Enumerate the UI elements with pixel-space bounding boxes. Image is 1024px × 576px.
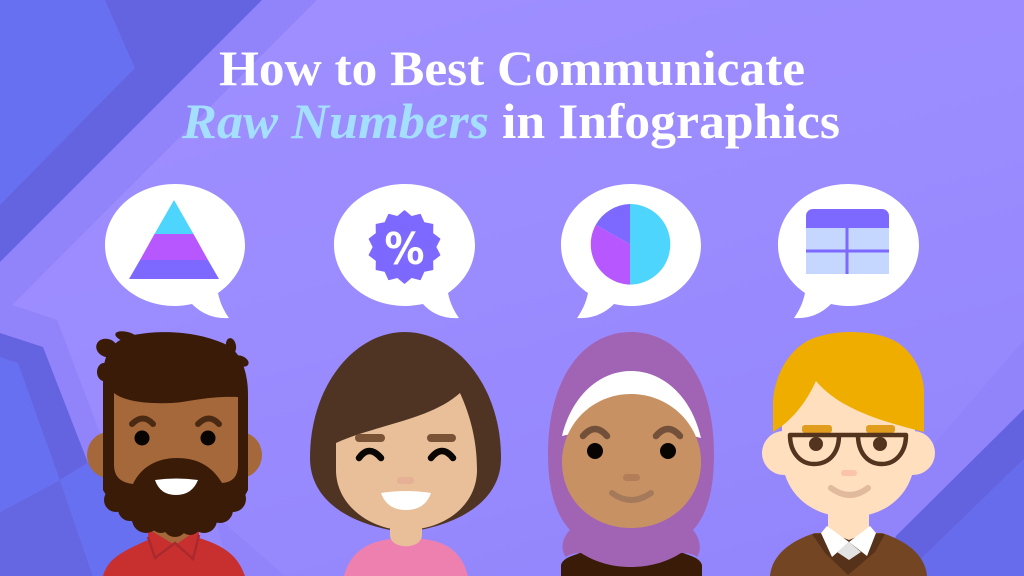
hair <box>773 332 924 432</box>
eyes and brows <box>583 429 680 459</box>
closed eyes <box>359 451 453 458</box>
shirt collar <box>821 526 876 560</box>
title <box>181 40 840 149</box>
speech bubble: percent badge <box>334 184 475 318</box>
icon: pyramid <box>129 200 219 279</box>
smile <box>612 493 651 500</box>
icon: percent badge: % <box>384 224 424 275</box>
shoulders <box>561 553 702 576</box>
smile <box>155 478 198 495</box>
neck <box>828 505 869 540</box>
character: blond man with glasses <box>762 332 935 576</box>
hair and beard <box>94 329 250 537</box>
pupils <box>809 437 887 451</box>
glasses <box>790 435 906 464</box>
icon: table <box>806 209 889 274</box>
character: bearded man <box>87 329 262 576</box>
white headband <box>562 371 701 438</box>
brows <box>802 425 895 433</box>
face <box>782 375 915 517</box>
eyes and brows <box>132 418 219 446</box>
nose <box>397 477 414 484</box>
sweater <box>770 533 927 576</box>
face <box>114 393 238 484</box>
nose <box>623 474 640 481</box>
neck <box>390 520 422 546</box>
speech bubble: pie chart <box>561 184 701 318</box>
icon: pie chart <box>591 204 670 285</box>
shirt <box>103 530 245 576</box>
character: woman with brown bob <box>310 332 501 576</box>
speech bubble: table <box>778 184 919 318</box>
character: woman in hijab <box>548 332 714 576</box>
face <box>562 394 701 528</box>
icon: percent badge <box>369 211 440 283</box>
ears <box>87 432 262 478</box>
smile <box>381 491 431 510</box>
title line 2: in Infographics <box>502 93 840 149</box>
smile <box>831 488 868 495</box>
nose <box>841 470 857 476</box>
brows <box>355 434 456 442</box>
ears <box>762 431 935 475</box>
speech bubble: pyramid chart <box>105 184 245 318</box>
title line 2 emphasis: Raw Numbers <box>181 93 489 149</box>
hair <box>310 332 501 530</box>
shirt <box>344 539 468 576</box>
hijab <box>548 332 714 567</box>
sweater collar <box>812 534 885 575</box>
face <box>336 393 477 530</box>
title line 1: How to Best Communicate <box>219 40 805 96</box>
